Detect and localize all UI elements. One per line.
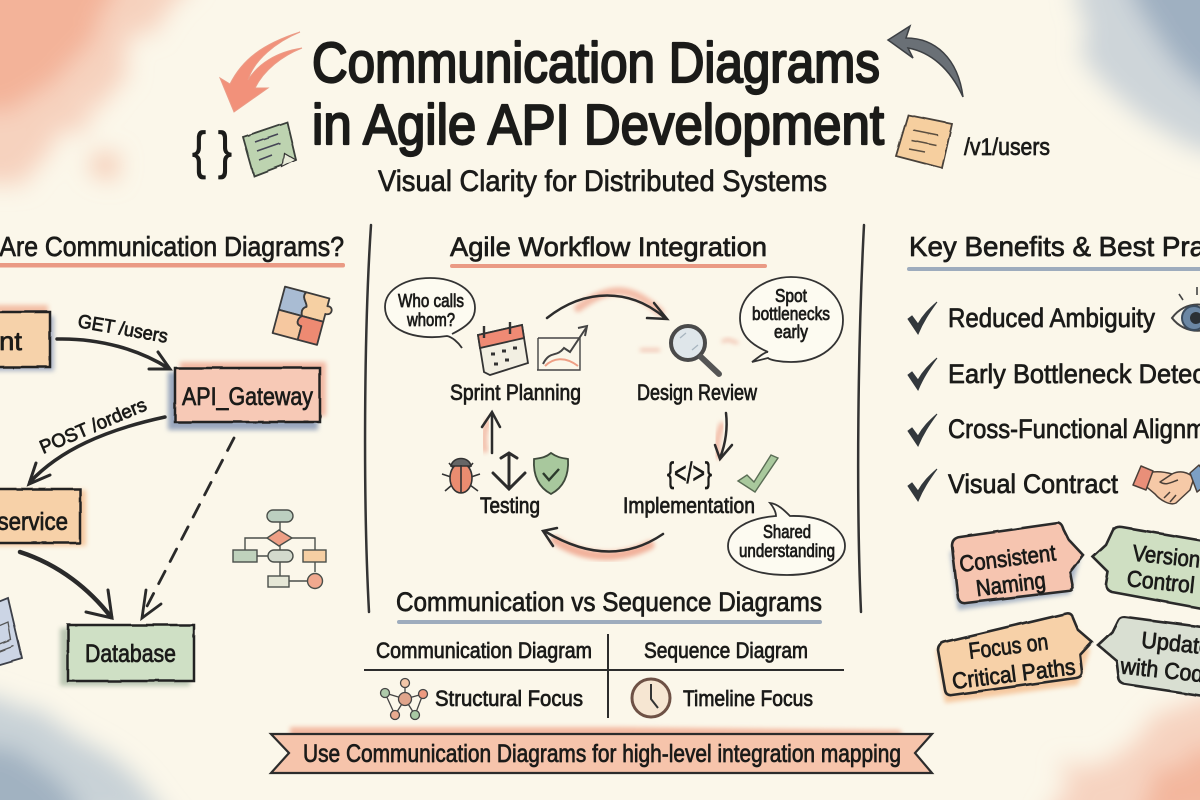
icon: curly braces: { } (192, 122, 232, 180)
node: api gateway (168, 362, 326, 430)
node: database (60, 625, 194, 686)
watercolor corner: top right (1075, 0, 1200, 165)
tag: update with code (1098, 617, 1200, 697)
arrow: service to database (20, 552, 112, 618)
icon: calendar (478, 322, 528, 375)
speech bubble: who calls whom: Who calls (398, 291, 464, 311)
step: implementation: Implementation (623, 493, 755, 518)
speech bubble: who calls whom: whom? (406, 310, 455, 330)
watercolor corner: bottom right (1045, 695, 1200, 800)
icon: document (0, 598, 22, 665)
icon: orange note (896, 115, 952, 168)
heading underline (907, 267, 1200, 271)
icon: code brackets: {</>} (667, 457, 712, 490)
heading: Communication vs Sequence Diagrams (396, 587, 822, 617)
icon: bug (442, 458, 480, 493)
node: database: Database (85, 640, 176, 668)
icon: clock (632, 679, 670, 717)
tag: version control: Control (1126, 565, 1196, 598)
icon: rising chart (537, 326, 587, 370)
label: get users: GET /users (76, 311, 169, 348)
label: endpoint path: /v1/users (964, 134, 1050, 161)
speech bubble: spot bottlenecks: bottlenecks (752, 304, 830, 324)
title: in Agile API Development (312, 93, 884, 157)
arrow: testing to planning (482, 412, 500, 453)
benefit: reduced ambiguity: Reduced Ambiguity (948, 303, 1155, 333)
label: structural focus: Structural Focus (435, 686, 583, 711)
icon: eye (1172, 287, 1200, 331)
speech bubble: shared understanding (728, 503, 845, 575)
banner: Use Communication Diagrams for high-level integration mapping (303, 740, 901, 768)
icon: flowchart (233, 510, 326, 588)
arrow: dark swoosh (888, 26, 963, 97)
tag: consistent naming: Consistent (958, 539, 1058, 577)
tag: consistent naming (950, 523, 1083, 610)
title: Communication Diagrams (312, 31, 880, 95)
heading underline (0, 263, 345, 268)
arrow: review to implementation (715, 413, 732, 459)
node: client (0, 305, 54, 371)
watercolor corner: top left (0, 0, 195, 200)
arrow: post orders (29, 417, 165, 484)
speech bubble: spot bottlenecks (740, 277, 843, 362)
step: design review: Design Review (637, 380, 757, 405)
banner (271, 727, 932, 773)
icon: magnifier (640, 326, 738, 374)
arrow: dashed gateway to database (142, 438, 234, 618)
speech bubble: spot bottlenecks: early (774, 322, 808, 342)
label: timeline focus: Timeline Focus (683, 686, 813, 711)
heading: Agile Workflow Integration (450, 232, 767, 262)
divider: right (858, 225, 864, 612)
table header: sequence diagram: Sequence Diagram (644, 638, 808, 663)
icon: puzzle (273, 287, 335, 346)
table header: communication diagram: Communication Diagram (376, 638, 592, 663)
speech bubble: spot bottlenecks: Spot (775, 286, 807, 306)
icon: shield (534, 453, 568, 494)
speech bubble: shared understanding: Shared (763, 522, 811, 542)
node: api gateway: API_Gateway (182, 383, 313, 411)
panel: key benefits (907, 231, 1200, 703)
step: sprint planning: Sprint Planning (450, 380, 581, 405)
panel: what are communication diagrams (0, 231, 345, 686)
step: testing: Testing (480, 493, 540, 518)
tag: focus on critical paths: Critical Paths (951, 653, 1077, 694)
benefit: visual contract: Visual Contract (948, 469, 1118, 499)
icon: branching arrows (493, 453, 525, 489)
node: microservice (0, 489, 86, 546)
divider: left (365, 225, 371, 612)
label: post orders: POST /orders (37, 395, 150, 459)
tag: focus on critical paths: Focus on (967, 628, 1050, 664)
icon: network (380, 678, 428, 720)
tag: focus on critical paths (936, 613, 1092, 703)
heading underline (450, 264, 767, 268)
title (312, 31, 884, 157)
icon: green note (243, 122, 296, 176)
panel: communication vs sequence (364, 587, 844, 720)
arrow: salmon swoosh (220, 32, 302, 112)
arrow: get users (57, 339, 170, 369)
tag: consistent naming: Naming (974, 567, 1047, 601)
speech bubble: who calls whom (385, 278, 475, 348)
arrow: implementation to testing (543, 528, 663, 556)
icon: green check (738, 455, 778, 492)
watercolor corner: bottom left (0, 695, 175, 800)
panel: agile workflow (385, 232, 845, 575)
speech bubble: shared understanding: understanding (739, 541, 835, 561)
tag: version control (1093, 527, 1200, 610)
icon: handshake (1133, 465, 1200, 504)
heading underline (397, 620, 822, 624)
subtitle: Visual Clarity for Distributed Systems (378, 165, 827, 198)
arrow: planning to review (547, 291, 667, 319)
